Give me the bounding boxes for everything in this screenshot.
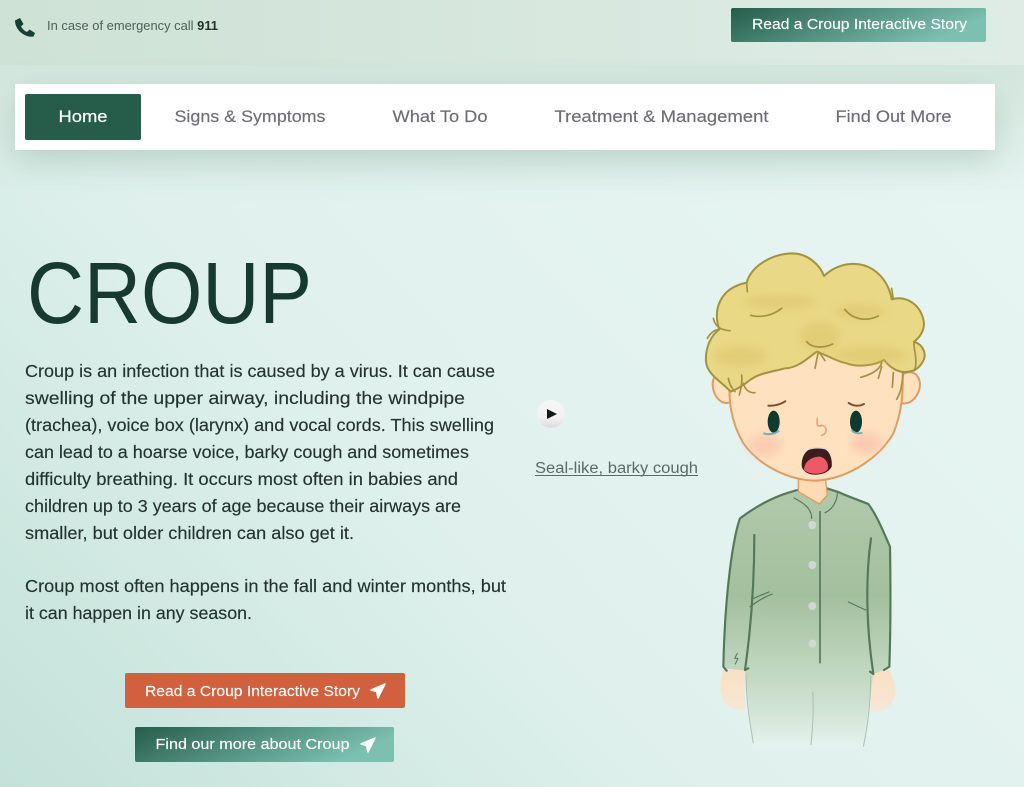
- buttons: [808, 521, 816, 648]
- button: find out more: Find our more about Croup: [156, 737, 350, 753]
- button: find out more: [135, 727, 394, 762]
- hair strands: [707, 283, 916, 399]
- navigation bar: [15, 84, 995, 150]
- nav: what to do: What To Do: [392, 108, 488, 126]
- icon: send arrow: [361, 738, 375, 752]
- cheek blushes: [748, 434, 782, 456]
- intro paragraph: can lead to a hoarse voice, barky cough and sometimes: [25, 442, 469, 462]
- suit outlines: [723, 488, 890, 674]
- button: read story top: Read a Croup Interactive Story: [752, 17, 968, 33]
- icon: send arrow: [371, 684, 385, 698]
- illustration: child with croup: [706, 253, 925, 747]
- suit: [723, 487, 891, 747]
- eyebrows: [768, 401, 785, 406]
- nav: treatment and management: Treatment & Management: [554, 108, 769, 126]
- hands: [720, 670, 745, 711]
- body in pyjamas: [720, 478, 896, 747]
- intro paragraph: swelling of the upper airway, including the windpipe: [25, 388, 465, 408]
- head: [706, 253, 925, 481]
- eyes: [763, 411, 862, 434]
- intro paragraph: Croup is an infection that is caused by a virus. It can cause: [25, 361, 495, 381]
- mouth: [802, 447, 832, 475]
- icon: phone: [15, 18, 35, 37]
- nose: [817, 418, 826, 435]
- intro paragraph: [25, 361, 495, 543]
- nav: signs and symptoms: Signs & Symptoms: [174, 108, 326, 126]
- nav: home: Home: [58, 108, 108, 126]
- emergency text: In case of emergency call 911: [47, 19, 218, 33]
- button: read story top: [731, 8, 986, 42]
- hair: [706, 253, 925, 392]
- top bar: [0, 0, 1024, 65]
- title: CROUP: [27, 245, 312, 342]
- season paragraph: [25, 576, 506, 623]
- season paragraph: Croup most often happens in the fall and winter months, but: [25, 576, 506, 596]
- hair shading: [713, 294, 907, 367]
- intro paragraph: children up to 3 years of age because their airways are: [25, 496, 461, 516]
- audio play button: [537, 400, 565, 428]
- intro paragraph: (trachea), voice box (larynx) and vocal cords. This swelling: [25, 415, 494, 435]
- nav: find out more: Find Out More: [836, 108, 952, 126]
- button: read story: Read a Croup Interactive Story: [145, 684, 361, 700]
- intro paragraph: smaller, but older children can also get it.: [25, 523, 354, 543]
- intro paragraph: difficulty breathing. It occurs most often in babies and: [25, 469, 458, 489]
- season paragraph: it can happen in any season.: [25, 603, 252, 623]
- button: read story: [125, 673, 405, 708]
- face: [729, 346, 903, 481]
- nav: home: [25, 94, 141, 140]
- audio link label: Seal-like, barky cough: [535, 460, 698, 477]
- ears: [713, 371, 732, 403]
- trouser lines: [746, 673, 871, 747]
- neck: [798, 478, 827, 504]
